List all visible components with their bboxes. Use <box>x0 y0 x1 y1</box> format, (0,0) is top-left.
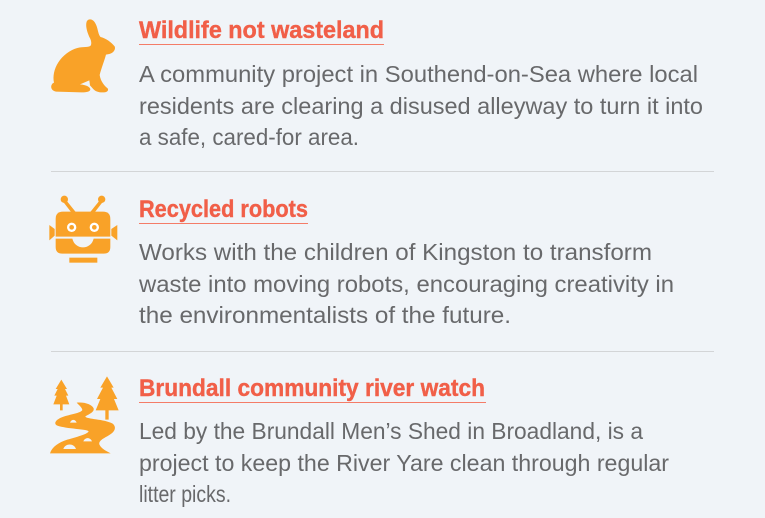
icon: rabbit <box>51 19 115 92</box>
text: Robots description: the environmentalists of the future. <box>139 302 511 328</box>
text: Robots description <box>138 239 674 328</box>
text: Wildlife description <box>139 61 703 150</box>
text: Wildlife description: A community project in Southend-on-Sea where local <box>139 61 698 87</box>
text: Robots description: waste into moving robots, encouraging creativity in <box>138 271 674 297</box>
heading: Brundall community river watch: Brundall community river watch <box>139 375 485 402</box>
text: Wildlife description: residents are clearing a disused alleyway to turn it into <box>139 93 703 119</box>
heading: Wildlife not wasteland: Wildlife not wasteland <box>139 17 384 44</box>
panel: Brundall community river watch <box>50 375 669 507</box>
panel: Recycled robots <box>49 196 674 328</box>
icon: trees and river <box>50 376 119 453</box>
text: Brundall description: litter picks. <box>139 481 231 507</box>
icon: robot <box>49 196 117 263</box>
text: Brundall description <box>139 418 669 507</box>
text: Robots description: Works with the children of Kingston to transform <box>139 239 652 265</box>
text: Brundall description: Led by the Brundall Men’s Shed in Broadland, is a <box>139 418 643 444</box>
text: Wildlife description: a safe, cared-for area. <box>139 124 359 150</box>
heading: Recycled robots: Recycled robots <box>139 196 308 223</box>
panel: Wildlife not wasteland <box>51 17 703 150</box>
text: Brundall description: project to keep the River Yare clean through regular <box>139 450 669 476</box>
